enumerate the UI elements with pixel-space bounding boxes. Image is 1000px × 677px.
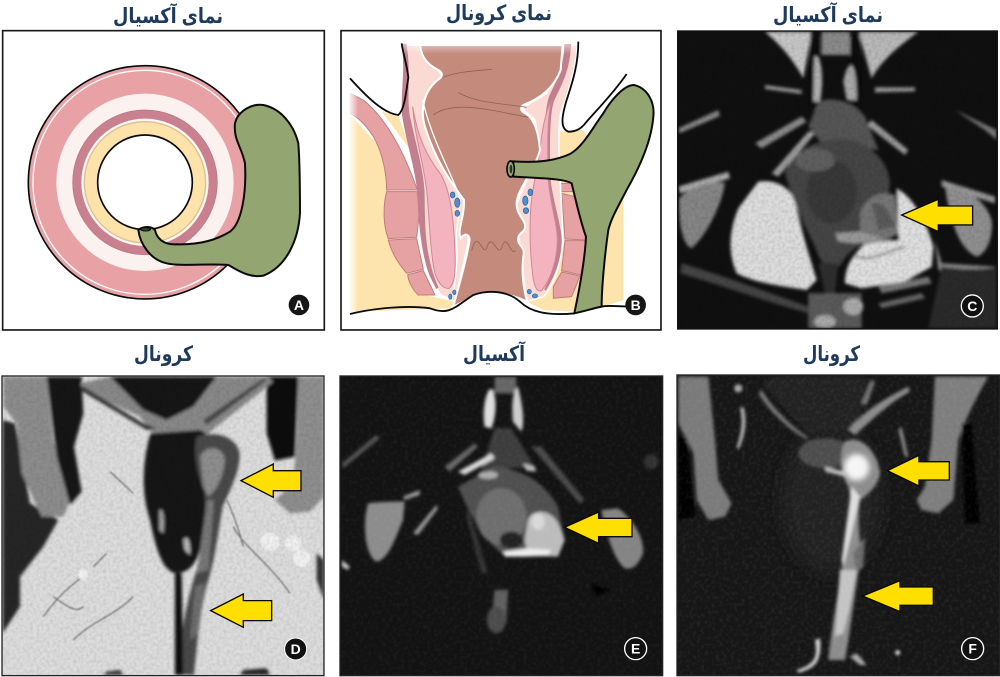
- left rose muscle band: [403, 45, 437, 288]
- badge D: [285, 638, 307, 660]
- badge C: [961, 295, 983, 317]
- fistula opening: [141, 228, 151, 231]
- left external sphincter: [350, 93, 435, 295]
- MRI anatomy: [341, 377, 662, 675]
- fistula lumen: [510, 165, 512, 173]
- arrow upper: [241, 464, 301, 497]
- arrow: [565, 512, 632, 543]
- badge B: [625, 295, 646, 315]
- arrow lower: [211, 594, 272, 627]
- heading: panel A title: نمای آکسیال: [113, 3, 223, 28]
- mucosal lines: [433, 69, 528, 252]
- left anal wall: [406, 45, 468, 302]
- badge A: [289, 295, 309, 315]
- rectum and anal canal: [420, 45, 563, 307]
- MRI anatomy: [3, 377, 324, 675]
- panel A: axial diagram: [3, 31, 324, 330]
- panel F: coronal MRI fat-suppressed: [677, 375, 1000, 676]
- fistula and abscess: [138, 105, 300, 276]
- badge A: A: [294, 297, 304, 313]
- heading: panel B title: نمای کرونال: [446, 2, 552, 25]
- right external sphincter: [553, 183, 587, 298]
- arrow lower: [863, 581, 933, 612]
- side fades: [350, 92, 358, 312]
- top fade: [402, 44, 576, 52]
- fistula and abscess: [513, 85, 654, 313]
- right internal sphincter: [530, 100, 557, 291]
- right rose muscle band: [545, 45, 570, 290]
- panel E: axial MRI fat-suppressed: [340, 376, 663, 676]
- badge D: D: [291, 641, 301, 657]
- badge B: B: [631, 297, 641, 313]
- perianal fat: [350, 112, 623, 312]
- skin outline: [350, 42, 630, 314]
- heading: panel D title: کرونال: [134, 343, 194, 366]
- concentric anal canal rings: [28, 66, 262, 299]
- heading: panel C title: نمای آکسیال: [773, 2, 883, 27]
- heading: panel E title: آکسیال: [463, 341, 526, 366]
- fistula opening: [507, 161, 514, 177]
- panel D: coronal MRI T2: [2, 376, 324, 676]
- badge C: C: [967, 298, 977, 314]
- left outer canal white line: [423, 100, 460, 300]
- arrow upper: [887, 455, 949, 486]
- left internal sphincter: [413, 107, 455, 288]
- panel C: axial MRI T2: [678, 31, 997, 329]
- badge F: F: [968, 641, 977, 657]
- badge F: [962, 638, 984, 660]
- arrow: [902, 199, 973, 232]
- badge E: E: [631, 641, 640, 657]
- MRI anatomy: [678, 376, 999, 675]
- panel B: coronal diagram: [341, 31, 661, 330]
- glands: [449, 189, 538, 299]
- MRI anatomy: [678, 32, 997, 328]
- badge E: [625, 638, 647, 660]
- heading: panel F title: کرونال: [803, 343, 861, 366]
- right anal wall: [517, 45, 577, 302]
